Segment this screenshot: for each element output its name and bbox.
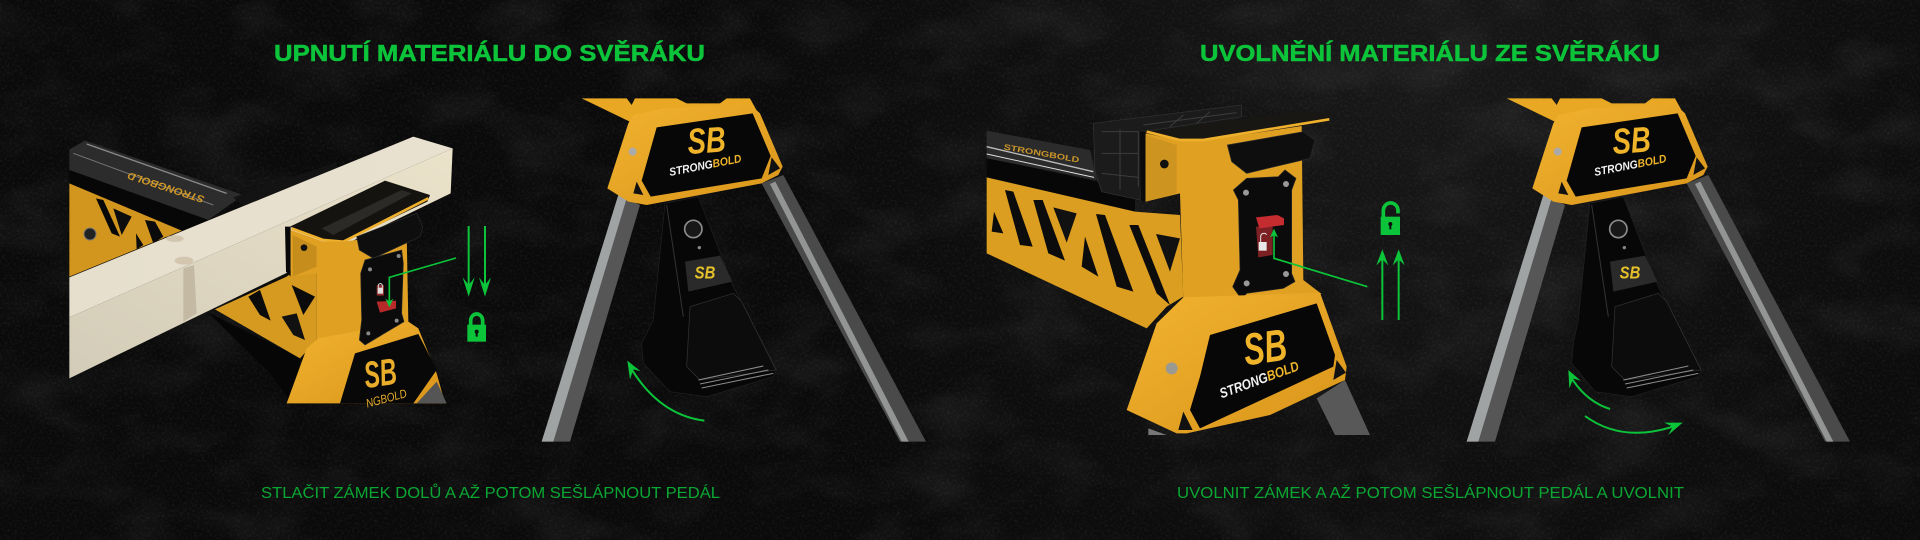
pedal bbox=[642, 197, 777, 397]
legs bbox=[1467, 175, 1850, 442]
top truss bbox=[582, 98, 760, 123]
vise handle bbox=[1227, 132, 1315, 173]
base hood with logo bbox=[607, 104, 783, 205]
locking plate with red latch bbox=[1233, 170, 1296, 299]
curved arrow right bbox=[1585, 416, 1683, 435]
rail and jaw bbox=[987, 105, 1242, 212]
down arrows bbox=[463, 226, 491, 297]
locking plate with red latch bbox=[359, 250, 404, 345]
caption: clamping instruction: STLAČIT ZÁMEK DOLŮ A AŽ POTOM SEŠLÁPNOUT PEDÁL bbox=[261, 483, 720, 502]
base with logo: STRONGBOLD bbox=[1217, 358, 1301, 401]
base hood with logo bbox=[1532, 104, 1708, 205]
icon: open lock bbox=[1381, 203, 1400, 235]
top plate of vise bbox=[285, 181, 430, 277]
base hood with logo: STRONGBOLD bbox=[1593, 153, 1668, 179]
vise rail bbox=[69, 141, 338, 232]
yellow truss body bbox=[69, 183, 317, 398]
icon: closed lock bbox=[467, 314, 486, 342]
legs bbox=[542, 175, 926, 442]
base with logo bbox=[1127, 293, 1370, 435]
base hood with logo: STRONGBOLD bbox=[668, 153, 743, 179]
title: clamping material: UPNUTÍ MATERIÁLU DO SVĚRÁKU bbox=[274, 39, 705, 66]
curved arrow bbox=[627, 361, 704, 421]
base hood with logo: SB bbox=[686, 118, 727, 162]
vise rail: STRONGBOLD bbox=[126, 169, 206, 204]
pointer arrow to latch bbox=[385, 258, 456, 307]
vise column and base bbox=[287, 230, 447, 411]
panel: vise with red latch released bbox=[987, 105, 1405, 435]
panel: vise clamping a wooden beam bbox=[69, 137, 491, 411]
top plate and column bbox=[1140, 112, 1330, 300]
wooden beam bbox=[69, 137, 453, 378]
panel: sawhorse with pedal raised (clamp) bbox=[542, 98, 926, 442]
caption: release instruction: UVOLNIT ZÁMEK A AŽ POTOM SEŠLÁPNOUT PEDÁL A UVOLNIT bbox=[1177, 483, 1684, 502]
yellow truss body bbox=[987, 177, 1183, 328]
top truss bbox=[1507, 98, 1685, 123]
base hood with logo: SB bbox=[1611, 118, 1652, 162]
pedal: SB bbox=[1620, 262, 1640, 282]
vise column and base: SB bbox=[361, 350, 399, 396]
pedal: SB bbox=[695, 262, 715, 282]
curved arrow up bbox=[1568, 370, 1610, 409]
pointer arrow to latch bbox=[1270, 229, 1367, 287]
up arrows bbox=[1376, 249, 1405, 320]
base with logo: SB bbox=[1240, 319, 1290, 375]
rail and jaw: STRONGBOLD bbox=[1003, 142, 1080, 165]
title: releasing material: UVOLNĚNÍ MATERIÁLU ZE SVĚRÁKU bbox=[1200, 39, 1660, 66]
pedal bbox=[1572, 197, 1702, 397]
vise handle bbox=[357, 213, 423, 258]
vise column and base: NGBOLD bbox=[364, 386, 409, 411]
panel: sawhorse with pedal (release) bbox=[1467, 98, 1850, 442]
